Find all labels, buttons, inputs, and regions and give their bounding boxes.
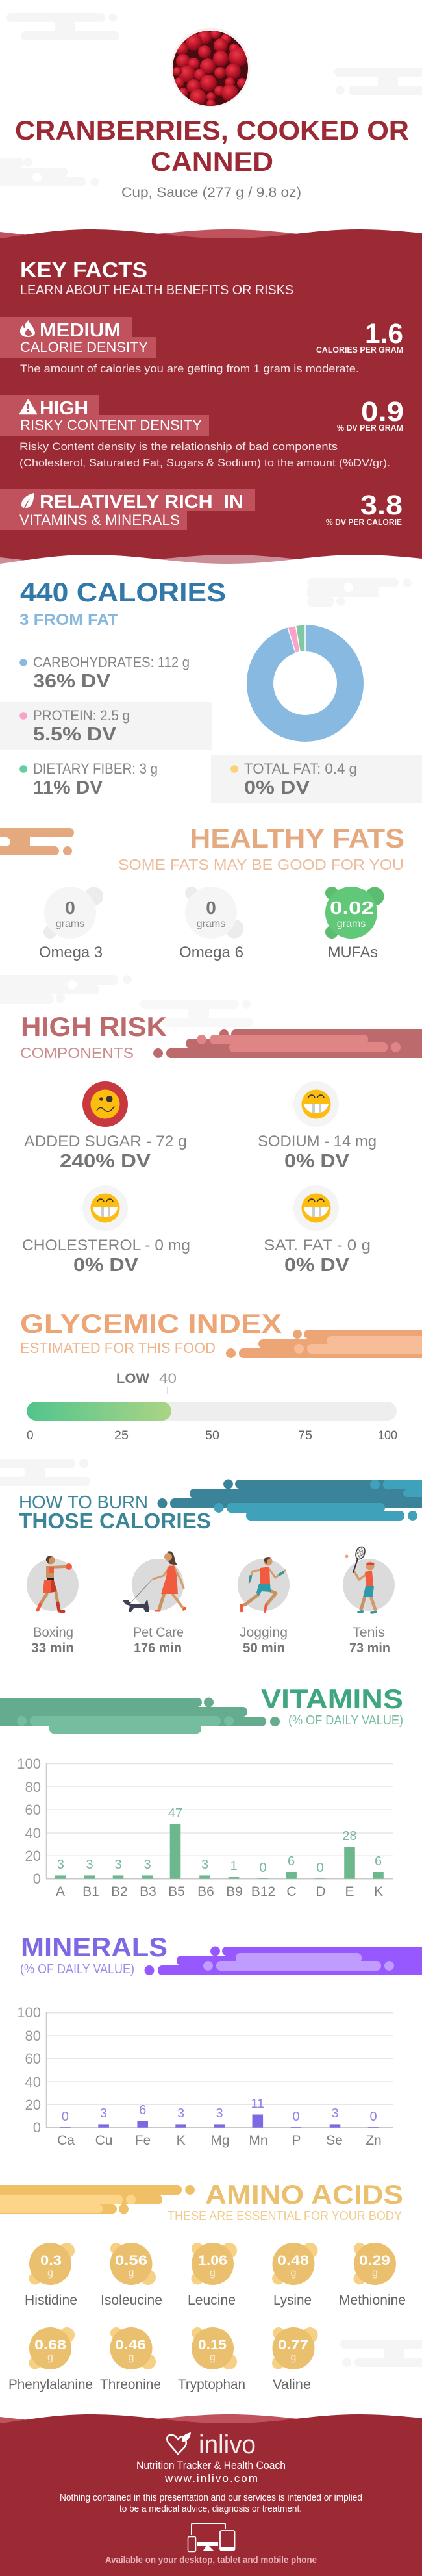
subheading: percent of daily value: (% OF DAILY VALUE)	[288, 1713, 403, 1728]
gauge: glycemic value: LOW	[116, 1371, 149, 1386]
vitamins and minerals row	[0, 489, 403, 530]
amino: isoleucine: Isoleucine	[101, 2293, 162, 2308]
decorative cloud: burn left	[0, 1459, 90, 1486]
amino: leucine: g	[210, 2267, 216, 2279]
availability note: Available on your desktop, tablet and mobile phone	[105, 2555, 317, 2566]
bar chart: minerals: Mg	[210, 2133, 230, 2148]
bar chart: vitamins: 47	[168, 1806, 182, 1821]
bar chart: minerals: 0	[62, 2110, 69, 2124]
bar chart: minerals: 0	[33, 2119, 41, 2136]
bar chart: vitamins: B6	[197, 1884, 214, 1899]
fat: MUFAs	[325, 887, 384, 961]
section: how to burn	[19, 1480, 422, 1656]
risky content density row: HIGH	[40, 398, 88, 419]
vitamins and minerals row: % DV PER CALORIE	[326, 517, 402, 527]
bar chart: minerals: Se	[326, 2133, 343, 2148]
heading: high risk: HIGH RISK	[21, 1011, 167, 1042]
component: added sugar: 240% DV	[60, 1151, 151, 1172]
activity: pet care: Pet Care	[133, 1625, 184, 1640]
subheading: essential: THESE ARE ESSENTIAL FOR YOUR BODY	[168, 2209, 402, 2223]
section: amino acids	[0, 2179, 406, 2392]
fat: omega 6: Omega 6	[179, 944, 243, 961]
fat: omega 6: 0	[206, 898, 216, 918]
bar chart: vitamins: B12	[251, 1884, 275, 1899]
bar chart: vitamins: 20	[25, 1848, 41, 1864]
amino: leucine: 1.06	[198, 2253, 227, 2268]
gauge: glycemic value	[27, 1371, 397, 1443]
heading: how to burn: HOW TO BURN	[19, 1492, 148, 1512]
bar chart: vitamins: 28	[342, 1829, 357, 1843]
heading: minerals: MINERALS	[21, 1932, 168, 1962]
amino: methionine	[339, 2243, 406, 2308]
decorative cloud: calories	[307, 578, 412, 607]
section: high risk	[20, 1011, 422, 1276]
bar chart: vitamins: B3	[140, 1884, 156, 1899]
bar chart: minerals: 11	[251, 2097, 264, 2111]
component: added sugar: ADDED SUGAR - 72 g	[24, 1133, 187, 1150]
subheading: components: COMPONENTS	[20, 1044, 134, 1061]
bar chart: minerals: 6	[139, 2103, 146, 2117]
section: healthy fats	[0, 823, 404, 961]
subheading: key facts: LEARN ABOUT HEALTH BENEFITS OR RISKS	[20, 283, 293, 297]
decorative bars: amino acids	[0, 2185, 195, 2214]
amino: isoleucine	[101, 2243, 162, 2308]
amino: histidine	[25, 2243, 77, 2308]
icon: cranberries photo	[170, 27, 251, 108]
amino: threonine	[100, 2327, 161, 2392]
macro: carbohydrates	[19, 654, 190, 692]
amino: isoleucine: g	[129, 2267, 134, 2279]
bar chart: minerals: Ca	[57, 2133, 75, 2148]
macro: dietary fiber	[19, 761, 158, 798]
bar chart: vitamins: B1	[82, 1884, 99, 1899]
icon: warning triangle	[19, 399, 36, 414]
bar chart: vitamins: 0	[259, 1861, 267, 1875]
amino: tryptophan: 0.15	[198, 2338, 227, 2353]
activity: jogging: Jogging	[240, 1625, 288, 1640]
component: saturated fat: SAT. FAT - 0 g	[264, 1237, 371, 1254]
title: CANNED	[151, 146, 273, 177]
bar chart: minerals: Fe	[135, 2133, 151, 2148]
activity: boxing: 33 min	[31, 1641, 74, 1656]
bar chart: minerals: Cu	[95, 2133, 112, 2148]
website link: www.inlivo.com	[164, 2472, 258, 2484]
heading: key facts: KEY FACTS	[20, 258, 147, 282]
amino: tryptophan: g	[210, 2352, 216, 2363]
subheading: percent of daily value: (% OF DAILY VALUE)	[20, 1962, 134, 1976]
component: sodium: SODIUM - 14 mg	[258, 1133, 377, 1150]
bar chart: minerals: Mn	[249, 2133, 268, 2148]
amino: valine	[272, 2327, 318, 2392]
macro: protein	[0, 702, 212, 750]
risky content density row: RISKY CONTENT DENSITY	[20, 417, 202, 433]
calorie density row: The amount of calories you are getting from 1 gram is moderate.	[20, 362, 359, 375]
amino: valine: 0.77	[278, 2338, 308, 2353]
title	[15, 115, 409, 177]
bar chart: vitamins: E	[345, 1884, 354, 1899]
amino: valine: Valine	[273, 2377, 311, 2392]
macro: total fat: 0% DV	[244, 777, 310, 798]
decorative cloud: top left	[6, 13, 119, 40]
bar chart: vitamins: 6	[375, 1854, 382, 1869]
bar chart: vitamins: 1	[230, 1859, 238, 1873]
component: sodium: 0% DV	[284, 1151, 350, 1172]
macro: total fat: TOTAL FAT: 0.4 g	[244, 761, 357, 777]
calorie density row: MEDIUM	[40, 320, 121, 341]
bar chart: minerals: 3	[331, 2106, 339, 2121]
amino: phenylalanine	[8, 2327, 93, 2392]
decorative cloud: top right	[334, 68, 422, 95]
component: saturated fat	[264, 1185, 371, 1276]
amino: histidine: 0.3	[40, 2253, 62, 2268]
activity: pet care: 176 min	[134, 1641, 182, 1656]
amino: histidine: g	[47, 2267, 53, 2279]
bar chart: vitamins: B2	[111, 1884, 128, 1899]
amino: lysine	[272, 2243, 318, 2308]
fat: omega 6: grams	[197, 918, 225, 929]
logo: inlivo	[167, 2431, 256, 2459]
section: glycemic index	[20, 1308, 422, 1443]
macro: carbohydrates: CARBOHYDRATES: 112 g	[33, 654, 190, 670]
title: CRANBERRIES, COOKED OR	[15, 115, 409, 145]
amino: phenylalanine: g	[47, 2352, 53, 2363]
bar chart: minerals: 80	[25, 2028, 41, 2044]
macro: protein: 5.5% DV	[33, 724, 117, 745]
bar chart: minerals: 20	[25, 2097, 41, 2113]
macro: carbohydrates: 36% DV	[33, 671, 111, 692]
macro: dietary fiber: 11% DV	[33, 777, 103, 798]
bar chart: vitamins: D	[316, 1884, 326, 1899]
bar chart: vitamins: 0	[316, 1861, 324, 1875]
risky content density row: 0.9	[361, 396, 404, 427]
panel: footer	[0, 2414, 422, 2576]
subheading: estimated: ESTIMATED FOR THIS FOOD	[20, 1339, 216, 1356]
component: sodium	[258, 1081, 377, 1172]
logo: inlivo: inlivo	[199, 2431, 256, 2459]
bar chart: vitamins: 40	[25, 1825, 41, 1841]
fat: omega 3: Omega 3	[39, 944, 103, 961]
decorative cloud: title left	[0, 158, 99, 186]
macro: total fat	[211, 755, 422, 803]
vitamins and minerals row: VITAMINS & MINERALS	[19, 512, 180, 528]
bar chart: vitamins: B9	[226, 1884, 243, 1899]
vitamins and minerals row: 3.8	[360, 490, 403, 521]
amino: phenylalanine: Phenylalanine	[8, 2377, 93, 2392]
amino: tryptophan: Tryptophan	[178, 2377, 245, 2392]
bar chart: vitamins: 3	[143, 1858, 151, 1872]
decorative bars: burn	[157, 1480, 422, 1521]
amino: isoleucine: 0.56	[115, 2253, 147, 2268]
amino: valine: g	[291, 2352, 296, 2363]
heading: those calories: THOSE CALORIES	[19, 1509, 211, 1533]
disclaimer	[60, 2492, 362, 2514]
gauge: glycemic value: 25	[114, 1429, 129, 1443]
disclaimer: to be a medical advice, diagnosis or treatment.	[119, 2503, 302, 2514]
risky content density row: % DV PER GRAM	[337, 423, 403, 433]
gauge: glycemic value: 50	[205, 1429, 219, 1443]
fat: omega 3: grams	[56, 918, 84, 929]
activity: boxing	[27, 1556, 79, 1656]
bar chart: vitamins: A	[56, 1884, 65, 1899]
activity: tennis: 73 min	[349, 1641, 390, 1656]
amino: threonine: g	[129, 2352, 134, 2363]
bar chart: vitamins: 3	[114, 1858, 122, 1872]
section: vitamins	[0, 1684, 403, 1899]
amino: methionine: 0.29	[359, 2253, 390, 2268]
amino: tryptophan	[178, 2327, 245, 2392]
component: cholesterol: 0% DV	[73, 1255, 139, 1276]
bar chart: minerals: K	[177, 2133, 186, 2148]
amino: leucine: Leucine	[188, 2293, 236, 2308]
amino: phenylalanine: 0.68	[34, 2338, 66, 2353]
gauge: glycemic value: 100	[378, 1429, 397, 1443]
decorative bars: vitamins	[0, 1698, 280, 1734]
bar chart: minerals: P	[292, 2133, 301, 2148]
icon: devices	[188, 2523, 235, 2551]
amino: lysine: Lysine	[273, 2293, 312, 2308]
wave: key facts bottom edge	[0, 555, 422, 585]
amino: histidine: Histidine	[25, 2293, 77, 2308]
panel: key facts	[0, 229, 422, 560]
fat: MUFAs: 0.02	[330, 898, 374, 918]
bar chart: vitamins: 3	[86, 1858, 93, 1872]
icon: flame	[20, 320, 35, 337]
activity: jogging: 50 min	[243, 1641, 285, 1656]
amino: methionine: Methionine	[339, 2293, 406, 2308]
calorie density row	[0, 317, 403, 375]
activity: tennis	[343, 1545, 395, 1656]
amino: threonine: Threonine	[100, 2377, 161, 2392]
bar chart: vitamins: 3	[57, 1858, 64, 1872]
icon: leaf	[21, 493, 34, 508]
gauge: glycemic value: 75	[298, 1429, 312, 1443]
bar chart: vitamins: 0	[33, 1871, 41, 1887]
bar chart: vitamins: 6	[288, 1854, 295, 1869]
bar chart: vitamins: 100	[17, 1756, 41, 1772]
risky content density row	[0, 395, 404, 469]
fat: omega 3	[39, 887, 103, 961]
disclaimer: Nothing contained in this presentation and our services is intended or implied	[60, 2492, 362, 2503]
fat: omega 6	[179, 887, 244, 961]
decorative bars: high risk	[153, 1029, 422, 1058]
macro: dietary fiber: DIETARY FIBER: 3 g	[33, 761, 158, 777]
bar chart: minerals: 60	[25, 2051, 41, 2067]
component: added sugar	[24, 1081, 187, 1172]
calorie density row: CALORIE DENSITY	[20, 339, 148, 355]
bar chart: vitamins: K	[374, 1884, 383, 1899]
bar chart: vitamins: C	[286, 1884, 297, 1899]
bar chart: minerals: 100	[17, 2004, 41, 2021]
decorative bars: healthy fats	[0, 828, 74, 855]
activity: tennis: Tenis	[353, 1625, 385, 1640]
tagline: Nutrition Tracker & Health Coach	[136, 2459, 286, 2471]
component: cholesterol: CHOLESTEROL - 0 mg	[22, 1237, 190, 1254]
vitamins and minerals row: RELATIVELY RICH IN	[40, 492, 243, 512]
fat: MUFAs: MUFAs	[328, 944, 378, 961]
calorie density row: 1.6	[365, 318, 403, 349]
gauge: glycemic value: 40	[159, 1371, 177, 1386]
decorative bars: glycemic index	[226, 1330, 422, 1358]
decorative cloud: high risk centre	[140, 1000, 253, 1027]
bar chart: minerals: 0	[369, 2110, 377, 2124]
serving size subtitle: Cup, Sauce (277 g / 9.8 oz)	[121, 185, 301, 200]
bar chart: vitamins: 80	[25, 1779, 41, 1795]
heading: vitamins: VITAMINS	[261, 1684, 403, 1714]
gauge: glycemic value: 0	[27, 1429, 34, 1443]
amino: lysine: g	[291, 2267, 296, 2279]
fat: omega 3: 0	[65, 898, 75, 918]
bar chart: minerals	[17, 2004, 393, 2148]
component: cholesterol	[22, 1185, 190, 1276]
subheading: healthy fats: SOME FATS MAY BE GOOD FOR YOU	[118, 856, 404, 873]
risky content density row: Risky Content density is the relationship of bad components	[19, 440, 338, 453]
activity: jogging	[238, 1557, 290, 1656]
component: saturated fat: 0% DV	[284, 1255, 350, 1276]
amino: methionine: g	[372, 2267, 378, 2279]
bar chart: vitamins	[17, 1756, 393, 1899]
bar chart: vitamins: 60	[25, 1802, 41, 1818]
bar chart: minerals: 3	[177, 2106, 184, 2121]
activity: pet care	[123, 1551, 185, 1656]
heading: glycemic index: GLYCEMIC INDEX	[20, 1308, 282, 1339]
heading: healthy fats: HEALTHY FATS	[190, 823, 404, 853]
decorative cloud: high risk left	[0, 975, 132, 1004]
bar chart: minerals: 0	[292, 2110, 300, 2124]
decorative cloud: amino right	[340, 2340, 422, 2367]
risky content density row: (Cholesterol, Saturated Fat, Sugars & Sodium) to the amount (%DV/gr).	[19, 457, 390, 469]
macro: protein: PROTEIN: 2.5 g	[33, 707, 130, 724]
amino: lysine: 0.48	[277, 2253, 309, 2268]
donut chart	[260, 625, 351, 729]
bar chart: vitamins: 3	[201, 1858, 208, 1872]
bar chart: minerals: Zn	[366, 2133, 382, 2148]
fat: MUFAs: grams	[337, 918, 366, 929]
section: calories	[0, 577, 422, 803]
subheading: from fat: 3 FROM FAT	[19, 611, 118, 629]
heading: 440 calories: 440 CALORIES	[20, 577, 226, 607]
activity: boxing: Boxing	[33, 1625, 73, 1640]
calorie density row: CALORIES PER GRAM	[316, 345, 403, 355]
amino: leucine	[188, 2243, 237, 2308]
bar chart: minerals: 3	[100, 2106, 107, 2121]
bar chart: minerals: 3	[216, 2106, 223, 2121]
section: minerals	[17, 1932, 422, 2148]
heading: amino acids: AMINO ACIDS	[205, 2179, 403, 2210]
decorative bars: minerals	[144, 1946, 422, 1975]
bar chart: vitamins: B5	[168, 1884, 185, 1899]
amino: threonine: 0.46	[115, 2338, 146, 2353]
bar chart: minerals: 40	[25, 2074, 41, 2090]
